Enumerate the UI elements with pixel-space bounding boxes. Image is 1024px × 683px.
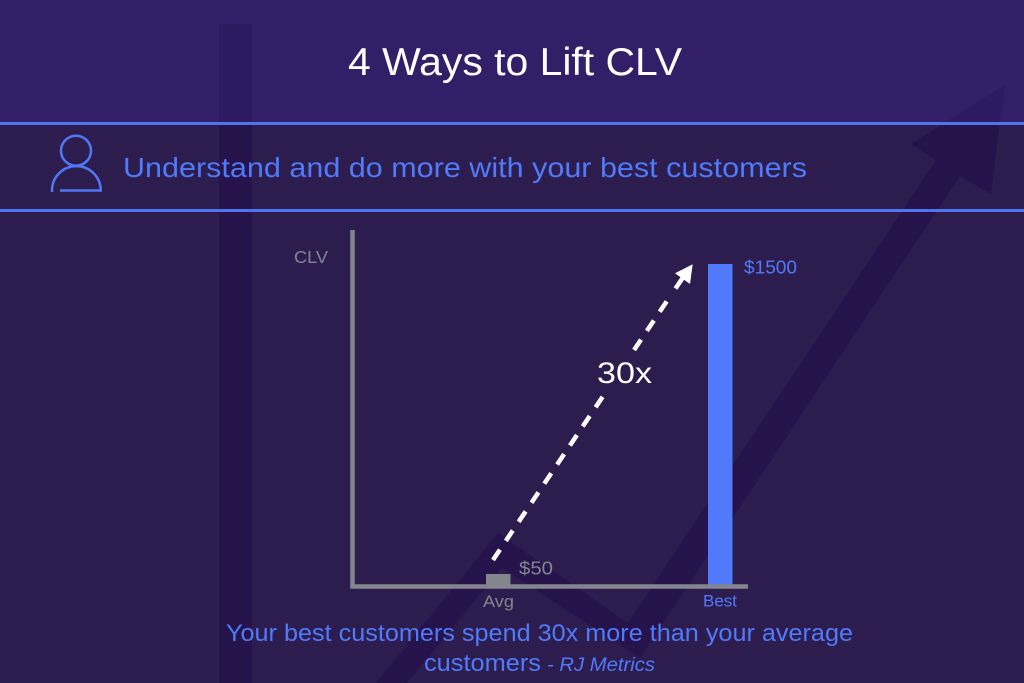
background decoration: vertical bar in header [219,24,252,123]
bar: average customers [486,574,510,585]
header background [0,0,1024,123]
background decoration: rising arrow [376,122,1000,683]
section heading: Understand and do more with your best customers [123,152,807,183]
background decoration: vertical bar [219,123,252,683]
background decoration: arrow tip in header [946,85,1005,122]
bar: best customers [708,264,732,585]
value label: $50: $50 [519,558,553,578]
header divider top [0,122,1024,125]
category label: Avg: Avg [483,592,514,611]
bar chart [294,230,797,611]
header divider bottom [0,209,1024,212]
icon: person [52,136,101,192]
multiplier label [594,351,656,394]
chart axes [352,230,748,586]
title: 4 Ways to Lift CLV [348,41,682,84]
caption line 1: Your best customers spend 30x more than your average [226,620,853,647]
y axis label: CLV [294,247,328,267]
caption [226,620,853,677]
category label: Best: Best [703,592,737,610]
source attribution: - RJ Metrics [547,655,656,676]
multiplier label: 30x [597,357,652,390]
caption line 2: customers [424,650,541,677]
arrow: 30x growth [493,264,693,560]
value label: $1500: $1500 [744,258,797,278]
